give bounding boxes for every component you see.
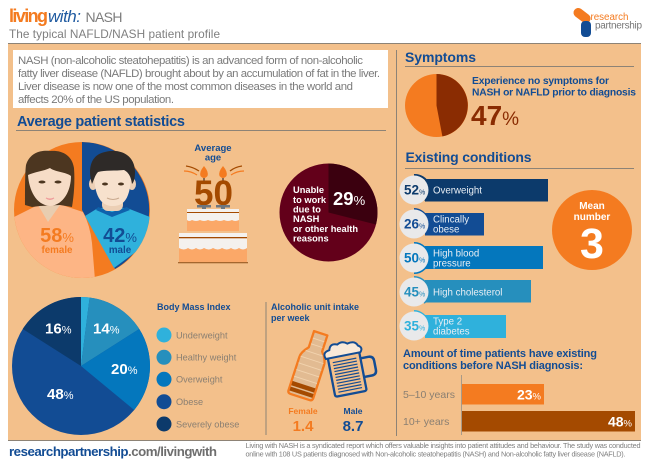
average age heading: age — [205, 152, 221, 164]
bar: type 2 diabetes: Type 2 — [433, 316, 462, 328]
bar: clinically obese: Clincally — [433, 214, 469, 226]
bar: high blood pressure: 50% — [404, 250, 425, 266]
pie: unable to work 29%: 29% — [333, 188, 366, 209]
text: no symptoms: Experience no symptoms for — [472, 76, 609, 87]
text: no symptoms — [471, 76, 636, 131]
alcohol intake section: per week — [271, 313, 311, 323]
text: no symptoms: 47% — [471, 100, 519, 131]
pie: body mass index: 14% — [93, 320, 120, 338]
subtitle: The typical NAFLD/NASH patient profile — [9, 27, 220, 41]
alcohol intake section: Alcoholic unit intake — [271, 302, 359, 312]
title: living — [9, 6, 48, 26]
bar: clinically obese — [400, 209, 484, 238]
bar: 10+ years: 10+ years — [403, 416, 449, 428]
icon: bottle — [288, 329, 333, 401]
bar: type 2 diabetes — [400, 311, 506, 340]
pie: unable to work 29%: due to — [293, 204, 321, 214]
pie: no symptoms 47% — [405, 74, 468, 137]
icon: woman — [25, 151, 74, 207]
title — [9, 6, 122, 26]
pie: unable to work 29%: Unable — [293, 185, 324, 195]
label: male 8.7: 8.7 — [343, 418, 363, 435]
heading: time before diagnosis: conditions before NASH diagnosis: — [403, 360, 583, 372]
pie: unable to work 29%: NASH — [293, 214, 320, 224]
heading: time before diagnosis: Amount of time patients have existing — [403, 348, 597, 360]
pie: body mass index: 20% — [111, 361, 138, 378]
heading: existing conditions: Existing conditions — [406, 149, 532, 165]
bar: overweight: Overweight — [433, 186, 482, 196]
intro text block: fatty liver disease (NAFLD) brought about by an accumulation of fat in the liver. — [18, 68, 380, 80]
bar: high cholesterol: High cholesterol — [433, 288, 502, 298]
intro text block: Liver disease is now one of the most common diseases in the world and — [18, 81, 353, 93]
pie: unable to work 29%: reasons — [293, 234, 329, 244]
label: male 8.7: Male — [344, 406, 363, 416]
heading: average patient statistics: Average patient statistics — [17, 114, 185, 130]
average age heading: Average — [194, 143, 232, 154]
title: with: — [48, 7, 81, 26]
legend: body mass index: Severely obese — [176, 420, 239, 430]
gender pie — [14, 142, 150, 278]
logo: research — [590, 12, 628, 23]
legend: body mass index: Healthy weight — [176, 352, 237, 362]
callout: mean number 3: Mean — [579, 201, 605, 212]
intro text block: NASH (non-alcoholic steatohepatitis) is an advanced form of non-alcoholic — [18, 55, 363, 67]
heading: time before diagnosis — [403, 348, 597, 372]
label: female 1.4 — [288, 406, 318, 435]
footnote — [246, 441, 640, 458]
legend: body mass index: Underweight — [176, 330, 228, 340]
icon: birthday cake — [178, 166, 248, 263]
footnote: Living with NASH is a syndicated report which offers valuable insights into patient attitudes and behaviour. The study was conducted — [246, 441, 640, 450]
pie: unable to work 29% — [280, 164, 378, 262]
bar: clinically obese: 26% — [404, 216, 425, 232]
bar: type 2 diabetes: 35% — [404, 318, 425, 334]
bar: 5-10 years: 5–10 years — [403, 389, 455, 401]
pie: unable to work 29%: or other health — [293, 224, 358, 234]
bar: type 2 diabetes: diabetes — [433, 326, 470, 338]
label: 42% male: 42% — [103, 225, 137, 247]
label: male 8.7 — [343, 406, 363, 435]
logo — [572, 6, 642, 37]
legend: body mass index: Obese — [176, 397, 203, 407]
label: 58% female: 58% — [40, 225, 74, 247]
pie: unable to work 29%: to work — [293, 195, 327, 205]
callout: mean number 3: 3 — [580, 220, 604, 268]
label: 58% female: female — [41, 245, 73, 256]
icon: birthday cake: 50 — [194, 174, 233, 213]
icon: man — [89, 151, 136, 211]
callout: mean number 3: number — [574, 212, 610, 223]
legend: body mass index — [156, 302, 239, 432]
footer url: researchpartnership.com/livingwith — [9, 444, 217, 459]
pie: body mass index — [12, 297, 150, 435]
bar: 5-10 years — [403, 384, 544, 404]
title: NASH — [86, 9, 122, 25]
bar: 10+ years — [403, 411, 635, 432]
bar: overweight — [400, 175, 548, 204]
label: female 1.4: Female — [288, 406, 318, 416]
bar: high blood pressure: pressure — [433, 258, 471, 270]
bar: 5-10 years: 23% — [517, 386, 542, 402]
pie: body mass index: 48% — [47, 386, 74, 403]
intro text block: affects 20% of the US population. — [18, 94, 174, 106]
label: 42% male: male — [109, 245, 132, 256]
legend: body mass index: Body Mass Index — [157, 302, 231, 312]
text: no symptoms: NASH or NAFLD prior to diagnosis — [472, 88, 636, 98]
alcohol intake section — [271, 302, 379, 435]
bar: high blood pressure — [400, 243, 543, 273]
bar: 10+ years: 48% — [608, 414, 633, 430]
bar: clinically obese: obese — [433, 224, 459, 236]
average age heading — [194, 143, 232, 164]
bar: overweight: 52% — [404, 182, 425, 198]
icon: beer mug — [323, 337, 379, 397]
bar: high cholesterol — [400, 277, 531, 306]
legend: body mass index: Overweight — [176, 374, 223, 384]
bar: high cholesterol: 45% — [404, 284, 425, 300]
callout: mean number 3 — [552, 190, 632, 270]
pie: body mass index: 16% — [45, 320, 72, 338]
bar: high blood pressure: High blood — [433, 248, 479, 260]
intro text block — [13, 50, 388, 108]
logo: partnership — [595, 20, 642, 32]
footnote: online with 108 US patients diagnosed with Non-alcoholic steatohepatitis (NASH) and Non-alcoholic fatty liver disease (NAFLD). — [246, 450, 626, 458]
label: female 1.4: 1.4 — [293, 418, 314, 435]
heading: symptoms: Symptoms — [405, 49, 476, 65]
